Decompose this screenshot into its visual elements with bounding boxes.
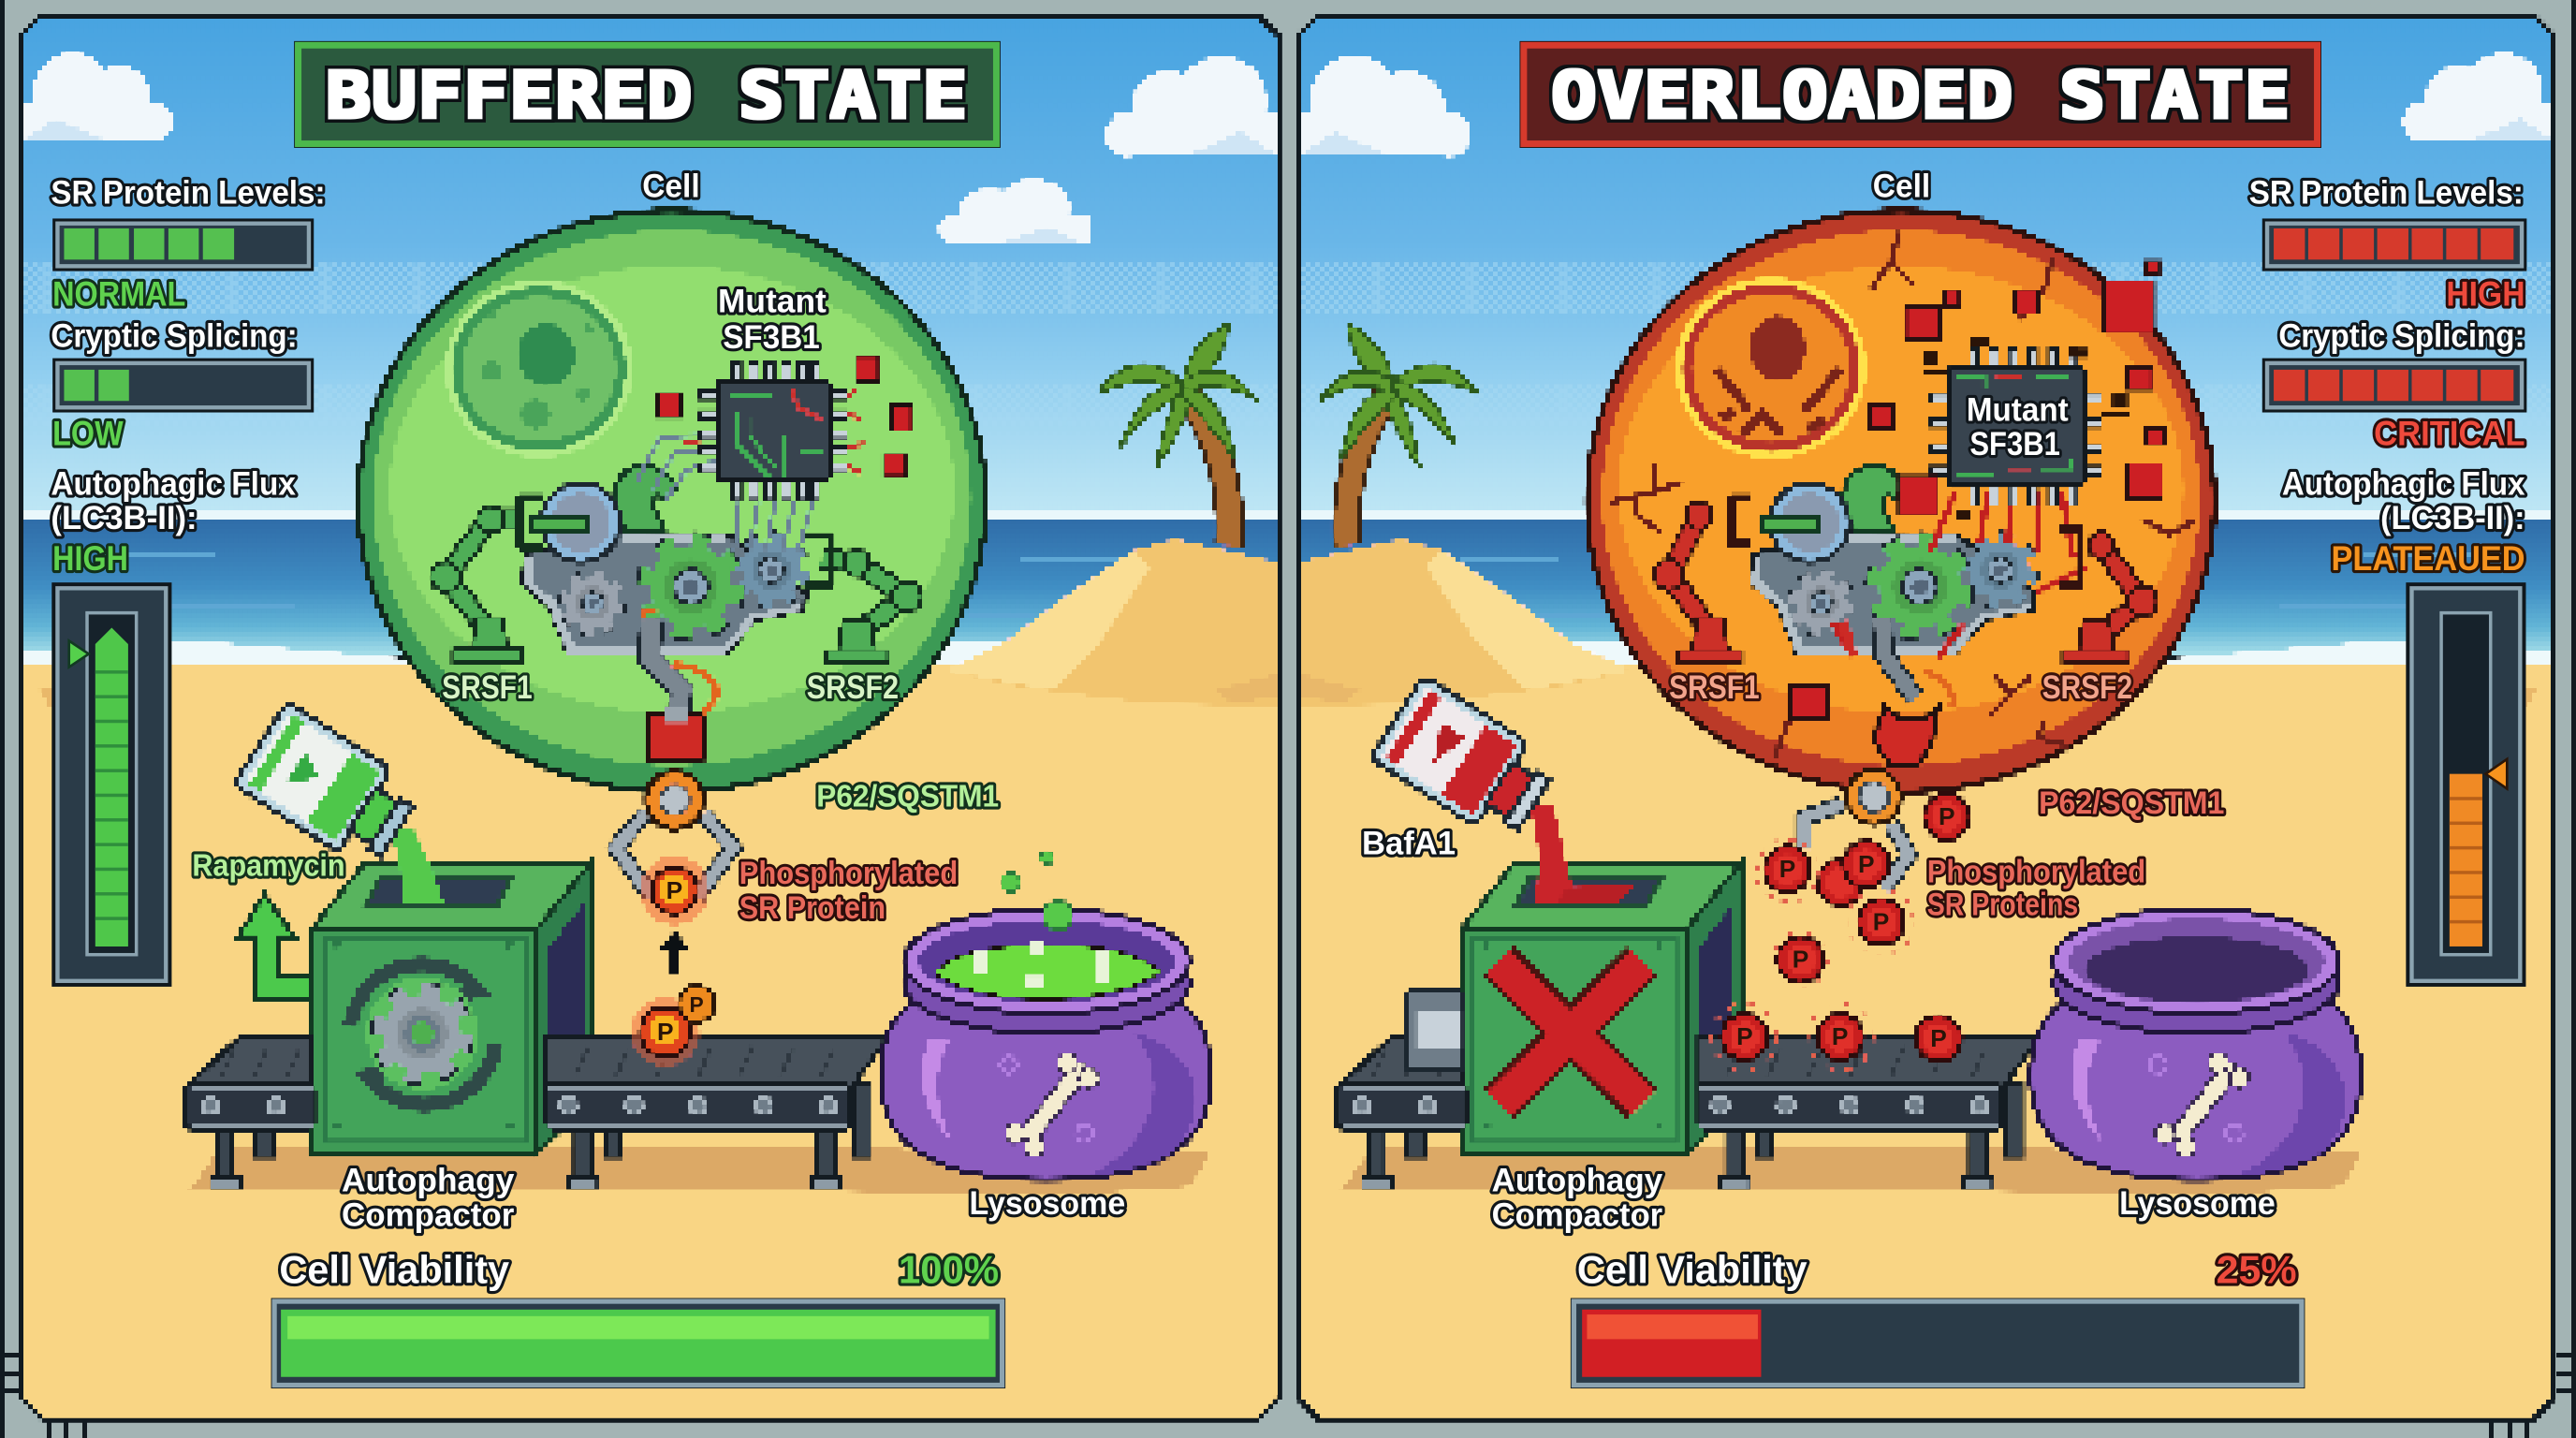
icon: rapamycin bottle	[233, 702, 424, 873]
arrow: upward	[657, 930, 692, 976]
label: phosphorylated SR proteins	[1927, 854, 2145, 923]
lysosome: green contents	[881, 851, 1211, 1180]
labels: P on proteins: P	[1873, 907, 1889, 935]
title: buffered state	[294, 41, 1001, 148]
label: phosphorylated SR protein	[739, 856, 958, 926]
claw: P62 with padlock	[616, 610, 733, 897]
meter: cryptic splicing critical	[2264, 360, 2525, 411]
label: P62: P62/SQSTM1	[2039, 785, 2224, 821]
label: mutant SF3B1: Mutant	[1967, 391, 2069, 428]
robotic arm: SRSF1 damaged	[1654, 498, 1751, 664]
text: SR level: NORMAL	[52, 274, 185, 313]
panel: overloaded state artwork	[1286, 17, 2563, 1436]
text: SR level: HIGH	[2446, 274, 2525, 313]
labels: P on proteins: P	[1930, 1024, 1947, 1052]
label: autophagy compactor	[342, 1162, 515, 1233]
label: SRSF1: SRSF1	[1669, 669, 1760, 706]
label: autophagy compactor: Autophagy	[342, 1162, 515, 1198]
glitch marks on machine	[1832, 493, 2086, 657]
conveyor shadow	[1340, 1145, 2363, 1196]
text: cell viability	[1577, 1248, 2297, 1292]
icon: machine gears damaged	[1751, 466, 2036, 654]
wires from chip	[637, 433, 813, 550]
text: autophagic flux	[51, 465, 296, 578]
label: phosphorylated SR protein: SR Protein	[739, 890, 886, 926]
icons: phosphorylated SR proteins overflow	[1712, 794, 1969, 1070]
text: cell viability: 25%	[2217, 1248, 2297, 1292]
robotic arm: SRSF2 damaged	[2060, 529, 2157, 664]
jammed intake	[1406, 990, 1462, 1070]
label: SRSF2: SRSF2	[2042, 669, 2132, 706]
label: SRSF2: SRSF2	[807, 669, 899, 706]
spill in hopper	[1553, 884, 1634, 905]
title: overloaded state: OVERLOADED STATE	[1551, 58, 2291, 133]
phosphorylated proteins on belt	[631, 986, 714, 1066]
bar: cell viability	[271, 1299, 1005, 1388]
label: mutant SF3B1	[718, 283, 827, 356]
panel background: beach scene	[13, 17, 1290, 1436]
red mutant fragments	[657, 357, 912, 477]
text: SR level: SR Protein Levels:	[2249, 175, 2524, 212]
text: cryptic splicing	[51, 317, 298, 453]
small cloud	[938, 179, 1089, 242]
panel background: beach scene	[1286, 17, 2563, 1436]
gauge: autophagic flux plateaued	[2408, 585, 2524, 984]
title: buffered state: BUFFERED STATE	[326, 58, 968, 133]
panel: buffered state artwork	[13, 17, 1290, 1436]
chip: mutant SF3B1	[683, 363, 864, 500]
text: autophagic flux: Autophagic Flux	[2282, 465, 2525, 502]
labels: P on proteins: P	[1736, 1022, 1753, 1050]
label: mutant SF3B1: SF3B1	[723, 319, 820, 356]
icon: machine gears	[522, 466, 807, 654]
labels: P on proteins: P	[657, 1018, 674, 1046]
label: lysosome: Lysosome	[970, 1185, 1125, 1222]
arrow: rapamycin activates compactor	[238, 894, 312, 1001]
gauge: autophagic flux	[54, 585, 169, 984]
label: mutant SF3B1	[1967, 391, 2069, 462]
cell: green	[359, 211, 986, 792]
panel: overloaded state labels and meters	[1362, 41, 2525, 1388]
labels: P on proteins: P	[1858, 850, 1875, 878]
labels: P on proteins	[1736, 802, 1955, 1052]
icon: phosphorylated SR protein in claw	[640, 856, 709, 925]
conveyor shadow	[189, 1145, 1211, 1196]
text: autophagic flux	[2282, 465, 2525, 578]
label: phosphorylated SR proteins: SR Proteins	[1927, 888, 2078, 923]
labels: P on proteins: P	[1832, 1022, 1848, 1050]
conveyor belt	[185, 1038, 887, 1190]
panel: buffered state labels and meters	[51, 41, 1125, 1388]
text: cryptic splicing: Cryptic Splicing:	[2278, 317, 2525, 354]
label: BafA1: BafA1	[1362, 826, 1456, 862]
label: autophagy compactor	[1492, 1162, 1663, 1233]
robotic arm: SRSF1	[431, 498, 544, 664]
label: phosphorylated SR protein: Phosphorylated	[739, 856, 958, 891]
label: autophagy compactor: Compactor	[342, 1196, 515, 1233]
label: SRSF1: SRSF1	[442, 669, 533, 706]
text: cell viability: Cell Viability	[279, 1248, 510, 1292]
label: rapamycin: Rapamycin	[192, 848, 345, 883]
label: mutant SF3B1: SF3B1	[1969, 426, 2060, 462]
text: autophagic flux: Autophagic Flux	[51, 465, 296, 502]
text: autophagic flux: (LC3B-II):	[51, 500, 198, 536]
cell: overloaded orange	[1587, 211, 2215, 792]
icon: BafA1 bottle	[1370, 675, 1560, 846]
meter: cryptic splicing	[54, 360, 312, 411]
text: SR level	[2249, 175, 2525, 313]
title: overloaded state	[1519, 41, 2321, 148]
labels: P on proteins: P	[1779, 855, 1795, 883]
label: autophagy compactor: Compactor	[1492, 1196, 1662, 1233]
labels: P on proteins: P	[690, 992, 704, 1017]
text: cell viability: Cell Viability	[1577, 1248, 1808, 1292]
icon: autophagy compactor blocked	[1462, 862, 1741, 1153]
label: cell: Cell	[642, 169, 700, 205]
labels: P on proteins: P	[1793, 946, 1808, 974]
chip: mutant SF3B1 cracked	[1930, 348, 2101, 506]
conveyor belt	[1338, 1038, 2039, 1190]
text: autophagic flux: HIGH	[52, 539, 128, 578]
nucleus	[446, 280, 633, 458]
red mutant fragments, overloaded	[1789, 261, 2165, 718]
text: autophagic flux: (LC3B-II):	[2380, 500, 2525, 536]
meter: SR protein levels	[54, 220, 312, 270]
text: cryptic splicing	[2278, 317, 2525, 453]
text: cell viability	[279, 1248, 999, 1292]
stream: rapamycin	[389, 829, 444, 902]
label: mutant SF3B1: Mutant	[718, 283, 827, 319]
claw: P62 overwhelmed	[1804, 618, 1953, 889]
text: SR level	[51, 175, 326, 313]
label: phosphorylated SR proteins: Phosphorylated	[1927, 854, 2145, 889]
lysosome: empty	[2030, 909, 2361, 1180]
label: cell: Cell	[1873, 169, 1930, 205]
text: SR level: SR Protein Levels:	[51, 175, 326, 212]
black debris	[1922, 337, 2130, 521]
stream: BafA1	[1530, 807, 1575, 902]
label: P62: P62/SQSTM1	[816, 780, 999, 814]
bar: cell viability low	[1571, 1299, 2305, 1388]
labels: P on proteins: P	[666, 876, 682, 904]
label: lysosome: Lysosome	[2119, 1185, 2276, 1222]
labels: P on proteins: P	[1939, 802, 1955, 830]
text: cryptic splicing: LOW	[52, 415, 124, 453]
labels: P on proteins	[657, 876, 704, 1046]
text: cryptic splicing: Cryptic Splicing:	[51, 317, 298, 354]
meter: SR protein levels high	[2264, 220, 2525, 270]
robotic arm: SRSF2	[807, 536, 922, 664]
text: cryptic splicing: CRITICAL	[2374, 415, 2525, 453]
text: cell viability: 100%	[899, 1248, 999, 1292]
cracks in cell	[1608, 231, 2195, 759]
text: autophagic flux: PLATEAUED	[2331, 539, 2525, 578]
label: autophagy compactor: Autophagy	[1492, 1162, 1663, 1198]
nucleus: damaged	[1676, 278, 1866, 459]
icon: autophagy compactor	[312, 862, 592, 1153]
